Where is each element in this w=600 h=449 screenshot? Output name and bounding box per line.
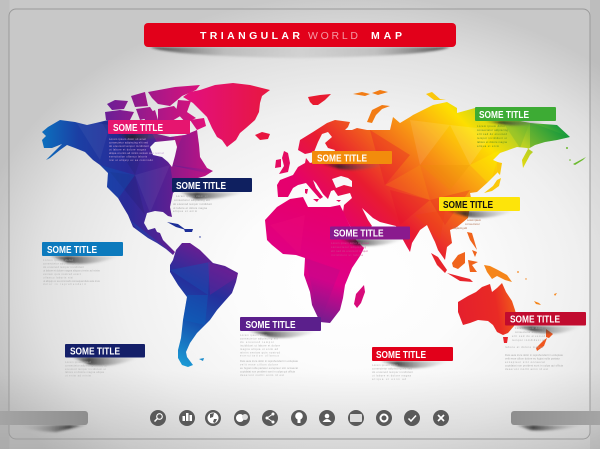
icon: screen — [348, 410, 364, 426]
text block: green: labore et dolore magna — [477, 140, 508, 144]
label: crimson some title — [505, 312, 586, 334]
icon: close — [433, 410, 449, 426]
Tasmania — [503, 337, 508, 343]
label: purple some title middle — [330, 226, 410, 246]
label: purple some title middle: SOME TITLE — [334, 228, 384, 240]
North America — [42, 120, 215, 255]
New Zealand — [536, 329, 553, 351]
Hudson Bay — [150, 140, 177, 167]
title bar: WORLD — [308, 30, 358, 42]
text block: navy upper: consectetur adipiscing elit — [174, 198, 210, 202]
Iceland — [255, 132, 270, 140]
text block: green: tempor incididunt ut — [477, 136, 507, 140]
text block: pink: exercitation ullamco laboris — [109, 154, 148, 158]
icon: search — [150, 410, 166, 426]
text block: purple middle: elit sed do eiusmod tempor — [331, 249, 368, 253]
SE Asia islands — [452, 232, 478, 272]
text block: yellow: Lorem ipsum — [467, 218, 481, 222]
text block: blue: veniam quis nostrud exerc — [43, 272, 82, 276]
text block: navy lower — [65, 360, 108, 378]
label: navy some title lower: SOME TITLE — [70, 346, 120, 358]
text block: navy lower: ut enim ad minim — [65, 374, 91, 378]
text block: purple lower: velit esse cillum dolore — [240, 362, 279, 366]
text block: purple lower: deserunt mollit anim id est — [240, 373, 284, 377]
icon row — [150, 410, 449, 426]
label: pink some title: SOME TITLE — [113, 122, 163, 134]
text block: crimson: Lorem ipsum dolor — [515, 326, 543, 330]
icon: bar chart — [179, 410, 195, 426]
text block: purple lower: Duis aute irure dolor in reprehenderit in voluptate — [240, 359, 299, 363]
label: navy some title lower — [65, 344, 145, 366]
icon: gear — [376, 410, 392, 426]
world map — [42, 83, 586, 367]
text block: navy upper: aliqua ut enim — [173, 209, 197, 213]
text block: navy lower: eiusmod tempor incididunt ut — [65, 367, 106, 371]
text block: purple middle: Lorem ipsum dolor sit amet — [331, 241, 369, 245]
South America — [170, 243, 240, 367]
label: yellow some title — [439, 197, 520, 218]
label: green some title — [475, 107, 556, 125]
Mediterranean islands — [305, 189, 341, 202]
icon: light bulb — [291, 410, 307, 426]
label: pink some title — [108, 120, 190, 140]
text block: purple lower: minim veniam quis nostrud — [240, 350, 281, 354]
text block: blue: consectetur adipiscing elit — [43, 262, 79, 266]
New Guinea — [484, 265, 512, 282]
Canadian arctic islands — [105, 85, 206, 130]
label: purple some title lower: SOME TITLE — [246, 319, 296, 331]
text block: purple lower: do eiusmod tempor — [240, 340, 274, 344]
text block: blue: dolor in reprehenderit — [43, 282, 86, 286]
text block: pink — [109, 137, 165, 162]
text block: purple lower — [240, 333, 299, 377]
UK and Ireland — [275, 151, 290, 174]
text block: blue: ut aliquip ex ea commodo consequat duis aute irure — [43, 279, 101, 283]
text block: pink: consectetur adipiscing elit sed — [109, 140, 149, 144]
text block: green: Lorem ipsum dolor — [477, 124, 505, 128]
Caribbean — [167, 222, 201, 238]
text block: crimson: consectetur adipiscing — [515, 330, 546, 334]
Africa — [265, 197, 364, 323]
label: red some title — [372, 347, 453, 368]
text block: green — [477, 124, 509, 148]
text block: purple middle — [331, 241, 369, 257]
text block: navy upper: do eiusmod tempor incididunt — [173, 202, 212, 206]
icon: check — [404, 410, 420, 426]
text block: red: aliqua ut enim ad — [372, 377, 407, 381]
text block: purple middle: incididunt ut labore — [331, 253, 364, 257]
text block: crimson: cupidatat non proident sunt in culpa qui officia — [505, 364, 564, 368]
text block: pink: do eiusmod tempor incididunt — [109, 144, 149, 148]
icon: user — [319, 410, 335, 426]
text block: yellow: adipiscing elit — [453, 226, 467, 230]
text block: navy lower: labore et dolore magna aliqua — [65, 370, 105, 374]
Black Sea — [332, 176, 352, 188]
text block: yellow: consectetur — [465, 222, 480, 226]
title bar: MAP — [371, 30, 402, 42]
label: green some title: SOME TITLE — [479, 109, 529, 121]
text block: blue: ullamco laboris nisi — [43, 276, 73, 280]
text block: purple lower: consectetur adipiscing elit — [240, 336, 278, 340]
Eurasia — [277, 102, 570, 260]
label: orange some title — [312, 151, 392, 170]
text block: red — [372, 363, 413, 381]
Madagascar — [354, 285, 365, 308]
icon: share — [262, 410, 278, 426]
label: crimson some title: SOME TITLE — [510, 314, 560, 326]
label: blue some title: SOME TITLE — [47, 244, 97, 256]
text block: red: ut labore et dolore magna — [372, 374, 412, 378]
text block: purple lower: Lorem ipsum dolor — [240, 333, 267, 337]
text block: pink: Lorem ipsum dolor sit amet — [109, 137, 146, 141]
icon: globe — [205, 410, 221, 426]
text block: crimson: deserunt mollit anim id est — [505, 367, 548, 371]
text block: crimson — [505, 326, 564, 371]
label: navy some title upper: SOME TITLE — [176, 180, 226, 192]
text block: crimson: Duis aute irure dolor in reprehenderit in voluptate — [505, 353, 564, 357]
text block: yellow — [453, 218, 481, 230]
label: blue some title — [42, 242, 123, 264]
text block: purple lower: eu fugiat nulla pariatur excepteur sint occaecat — [240, 366, 298, 370]
text block: purple lower: exercitation ullamco — [240, 354, 280, 358]
label: navy some title upper — [172, 178, 252, 199]
text block: navy lower: consectetur adipiscing elit sed do — [65, 364, 108, 368]
text block: pink: aliqua ut enim ad minim veniam quis nostrud — [109, 151, 165, 155]
text block: crimson: elit sed do eiusmod — [512, 334, 546, 338]
label: orange some title: SOME TITLE — [317, 152, 367, 164]
label: purple some title lower — [240, 317, 321, 338]
title bar: TRIANGULAR — [200, 30, 300, 42]
text block: green: elit sed do eiusmod — [477, 132, 508, 136]
text block: red: do eiusmod tempor incididunt — [372, 370, 413, 374]
Japan, Sakhalin, Kurils — [484, 162, 502, 193]
text block: pink: nisi ut aliquip ex ea commodo — [109, 158, 154, 162]
text block: navy upper — [173, 194, 212, 213]
text block: blue — [43, 258, 101, 286]
text block: red: Lorem ipsum dolor — [372, 363, 398, 367]
text block: purple lower: magna aliqua ut enim ad — [240, 347, 279, 351]
text block: blue: ut labore et dolore magna aliqua ut enim ad minim — [43, 268, 100, 272]
text block: green: aliqua ut enim — [477, 144, 499, 148]
text block: navy upper: ut labore et dolore magna — [173, 206, 208, 210]
text block: green: consectetur adipiscing — [477, 128, 509, 132]
icon: speech bubbles — [234, 410, 250, 426]
right gray tab — [511, 411, 600, 430]
Greenland — [183, 83, 270, 147]
text block: navy lower: Lorem ipsum dolor — [65, 360, 91, 364]
text block: purple lower: cupidatat non proident sunt in culpa qui officia — [240, 370, 296, 374]
Novaya Zemlya and arctic islands — [353, 90, 390, 123]
text block: blue: do eiusmod tempor incididunt — [43, 265, 84, 269]
label: red some title: SOME TITLE — [376, 349, 426, 361]
left gray tab — [0, 411, 88, 432]
text block: purple middle: consectetur adipiscing — [331, 245, 367, 249]
text block: navy upper: Lorem ipsum dolor sit — [176, 194, 208, 198]
Svalbard — [308, 94, 331, 105]
title bar — [144, 23, 456, 58]
label: yellow some title: SOME TITLE — [443, 199, 493, 211]
text block: pink: ut labore et dolore magna — [109, 148, 147, 152]
text block: crimson: excepteur sint occaecat — [505, 360, 545, 364]
text block: crimson: tempor incididunt ut — [512, 338, 545, 342]
text block: crimson: labore et dolore magna — [505, 345, 544, 349]
text block: red: consectetur adipiscing elit sed — [372, 366, 413, 370]
text block: crimson: velit esse cillum dolore eu fugiat nulla pariatur — [505, 356, 560, 360]
text block: purple lower: incididunt ut labore et dolore — [240, 344, 281, 348]
text block: blue: Lorem ipsum dolor — [43, 258, 73, 262]
Australia — [458, 283, 517, 335]
